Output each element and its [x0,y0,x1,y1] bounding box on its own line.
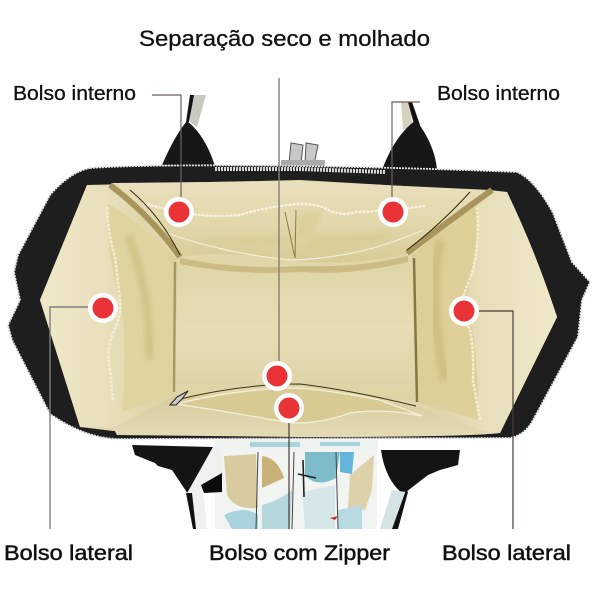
bottom straps and print fabric [132,440,460,529]
icon: zipper pulls [289,143,318,165]
callout: zipper pocket line [288,420,290,529]
marker: right side pocket [449,296,479,326]
label: right side pocket: Bolso lateral [442,542,571,565]
top handles and zipper pull [162,95,437,170]
frayed pocket seams [143,203,425,216]
panel: interior base [40,180,557,436]
icon: left handle [190,95,206,127]
bag interior lining [40,180,557,437]
panel: front base under the pocket [113,396,500,437]
label: left side pocket: Bolso lateral [4,542,133,565]
icon: right handle [401,102,412,130]
panel: right side wall [412,190,557,433]
label: zipper pocket: Bolso com Zipper [209,542,390,565]
panel: back wall [172,258,418,400]
left strap edge [186,447,222,529]
callout: centre divider line [278,78,280,364]
icon: zipper slider [170,391,188,405]
label: right inner pocket: Bolso interno [437,83,560,105]
patterned fabric [215,448,377,529]
label: left inner pocket: Bolso interno [13,83,136,105]
callout: left inner pocket line [152,95,181,200]
icon: right bottom strap tab [381,450,460,495]
marker: left side pocket [88,293,118,323]
bag shell with zipper edge [8,165,590,439]
callout: left side pocket line [50,307,92,529]
marker: zipper pocket [274,393,304,423]
callout: right side pocket line [475,311,513,529]
title: Separação seco e molhado [139,26,430,51]
panel: zipper pocket opening [176,388,422,423]
marker: left inner pocket [164,197,194,227]
callout: right inner pocket line [392,102,420,200]
corner folds [110,185,180,257]
marker: right inner pocket [378,197,408,227]
zipper stitching at the top [215,169,385,172]
right strap edge [380,490,406,529]
marker: wet and dry separation [262,361,292,391]
panel: left side wall [40,185,178,428]
icon: left bottom strap tab [132,445,213,497]
light strip under zipper [215,440,378,449]
panel: top wet/dry pockets flap [112,181,490,262]
